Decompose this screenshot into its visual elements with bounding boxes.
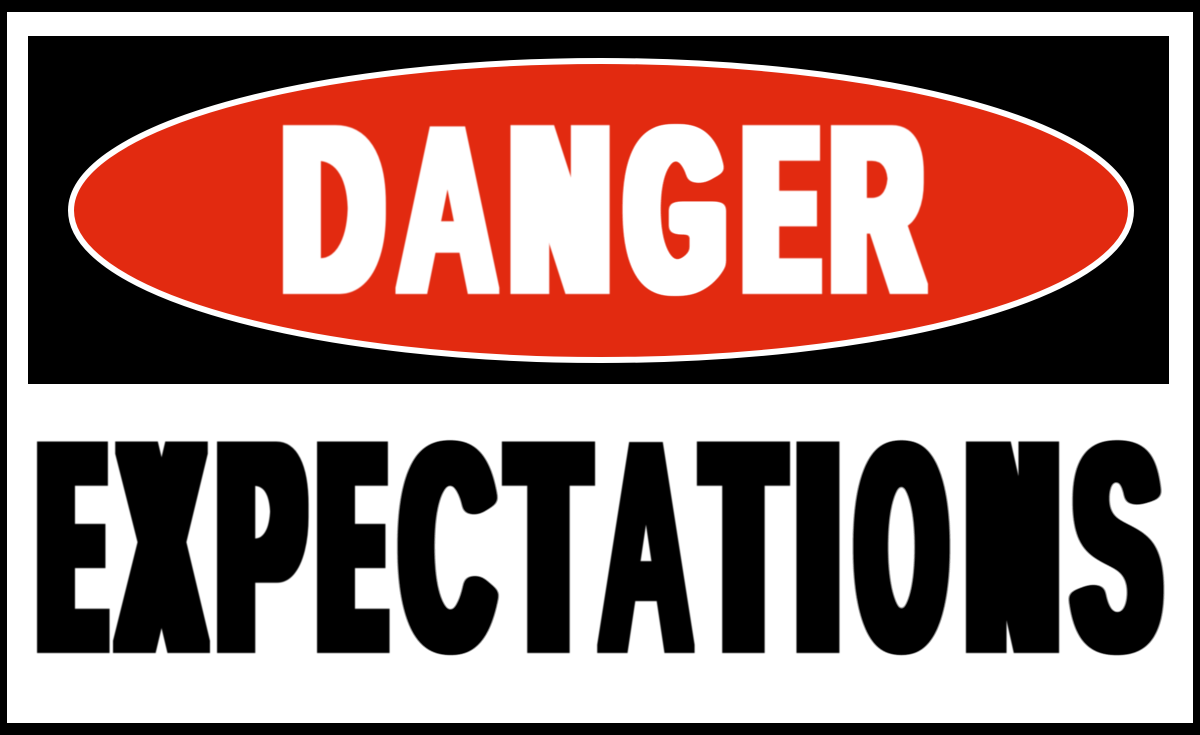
heading: EXPECTATIONS: O	[858, 386, 945, 710]
heading: EXPECTATIONS: C	[402, 386, 493, 710]
heading: DANGER: A	[398, 78, 497, 341]
heading: EXPECTATIONS: I	[802, 385, 834, 709]
heading: EXPECTATIONS: E	[44, 385, 100, 709]
panel: black header	[28, 36, 1169, 384]
heading: EXPECTATIONS: T	[709, 385, 778, 709]
heading: DANGER	[283, 78, 922, 341]
heading: DANGER: G	[628, 80, 724, 338]
heading: DANGER: D	[283, 80, 383, 338]
heading: EXPECTATIONS: T	[514, 385, 583, 709]
heading: EXPECTATIONS	[44, 382, 1160, 712]
heading: EXPECTATIONS: E	[324, 385, 380, 709]
heading: EXPECTATIONS: N	[971, 385, 1054, 709]
heading: DANGER: N	[513, 80, 608, 338]
heading: EXPECTATIONS: P	[219, 385, 303, 709]
heading: DANGER: R	[832, 80, 922, 338]
heading: EXPECTATIONS: X	[125, 385, 199, 709]
red oval with white outline	[71, 61, 1131, 360]
heading: DANGER: E	[747, 80, 815, 338]
heading: EXPECTATIONS: A	[600, 382, 692, 712]
